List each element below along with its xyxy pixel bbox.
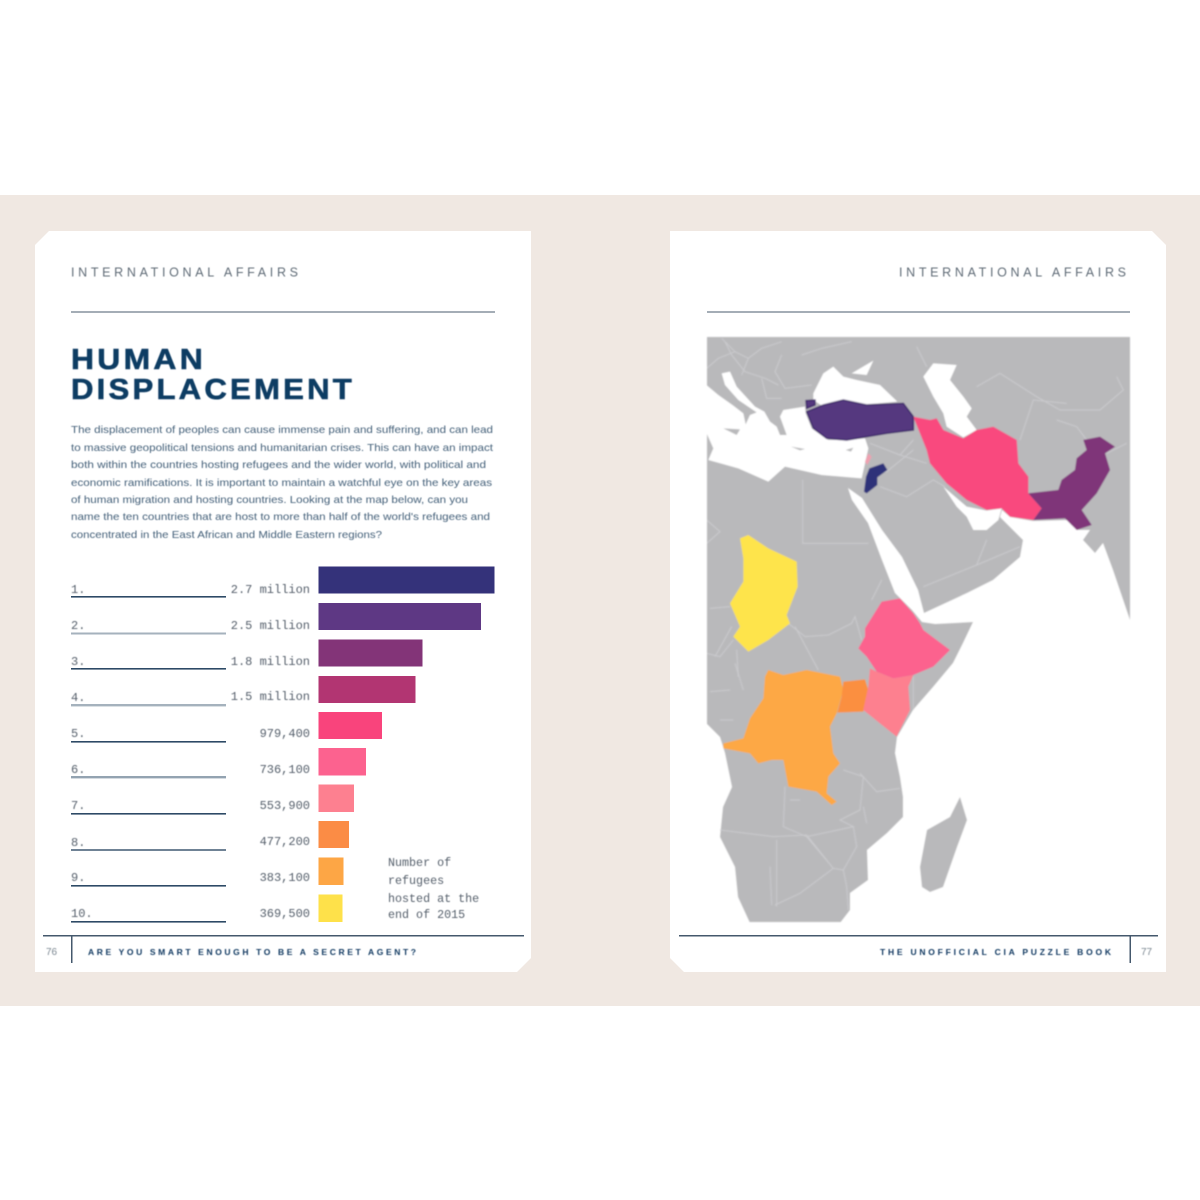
- Lebanon: [865, 453, 872, 465]
- left page footer: 76: [46, 947, 58, 958]
- left page footer: [43, 935, 524, 963]
- Ethiopia: [858, 598, 950, 678]
- title: [71, 344, 355, 406]
- seas: [706, 361, 1131, 923]
- panel: left page: [35, 231, 531, 972]
- DR Congo: [723, 670, 843, 805]
- intro text block: The displacement of peoples can cause immense pain and suffering, and can lead: [71, 424, 493, 436]
- legend note: end of 2015: [388, 908, 465, 922]
- Kenya: [863, 668, 913, 737]
- intro text block: name the ten countries that are host to more than half of the world's refugees and: [71, 511, 490, 523]
- legend note: refugees: [388, 874, 444, 888]
- values: 369,500: [260, 907, 310, 921]
- intro text block: to massive geopolitical tensions and humanitarian crises. This can have an impact: [71, 442, 493, 454]
- row numbers: 9.: [71, 871, 85, 885]
- Turkey: [806, 400, 913, 440]
- right page footer: 77: [1141, 947, 1153, 958]
- panel: right page: [670, 231, 1166, 972]
- Pakistan: [1028, 437, 1115, 530]
- values: 383,100: [260, 871, 310, 885]
- row numbers: 5.: [71, 727, 85, 741]
- row numbers: 3.: [71, 655, 85, 669]
- map: refugee host countries: [706, 337, 1131, 923]
- intro text block: [71, 424, 493, 541]
- bar chart: refugees hosted: [71, 566, 494, 923]
- answer lines: [71, 596, 226, 923]
- values: 2.7 million: [231, 583, 310, 597]
- title: HUMAN: [71, 344, 206, 376]
- East and Central Africa host countries: [723, 598, 950, 805]
- left page header: INTERNATIONAL AFFAIRS: [71, 266, 298, 280]
- intro text block: of human migration and hosting countries. Looking at the map below, can you: [71, 494, 468, 506]
- legend note: [388, 856, 479, 922]
- row numbers: 8.: [71, 836, 85, 850]
- row numbers: 7.: [71, 799, 85, 813]
- Uganda: [837, 679, 868, 713]
- legend note: hosted at the: [388, 892, 479, 906]
- bars: [318, 566, 494, 922]
- Chad: [730, 535, 798, 652]
- left page footer: ARE YOU SMART ENOUGH TO BE A SECRET AGENT?: [88, 947, 416, 957]
- values: 1.8 million: [231, 655, 310, 669]
- right page header: INTERNATIONAL AFFAIRS: [899, 266, 1126, 280]
- right page footer: [679, 935, 1158, 963]
- row numbers: [71, 583, 93, 921]
- intro text block: economic ramifications. It is important to maintain a watchful eye on the key areas: [71, 477, 492, 489]
- islands: [723, 428, 853, 452]
- border lines: [707, 338, 1127, 910]
- values: 553,900: [260, 799, 310, 813]
- right page footer: THE UNOFFICIAL CIA PUZZLE BOOK: [880, 947, 1112, 957]
- values: 979,400: [260, 727, 310, 741]
- Madagascar: [920, 797, 967, 892]
- legend note: Number of: [388, 856, 451, 870]
- Middle East host countries: [806, 400, 1115, 530]
- values: 736,100: [260, 763, 310, 777]
- values: 2.5 million: [231, 619, 310, 633]
- Jordan: [864, 463, 887, 493]
- values: 1.5 million: [231, 690, 310, 704]
- background band: [0, 195, 1200, 1006]
- title: DISPLACEMENT: [71, 374, 355, 406]
- row numbers: 4.: [71, 691, 85, 705]
- intro text block: both within the countries hosting refugees and the wider world, with political and: [71, 459, 486, 471]
- row numbers: 2.: [71, 619, 85, 633]
- intro text block: concentrated in the East African and Middle Eastern regions?: [71, 529, 382, 541]
- row numbers: 10.: [71, 907, 93, 921]
- values: [231, 583, 310, 921]
- Iran: [913, 417, 1042, 520]
- row numbers: 1.: [71, 583, 85, 597]
- values: 477,200: [260, 835, 310, 849]
- land: [707, 337, 1130, 922]
- row numbers: 6.: [71, 763, 85, 777]
